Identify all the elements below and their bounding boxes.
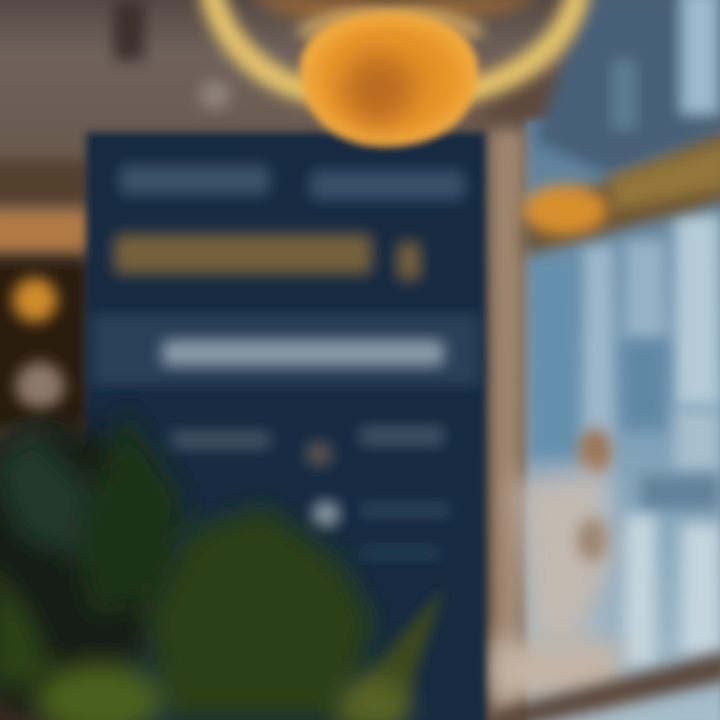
panel: wooden column [490, 130, 524, 720]
icon: figure in window [515, 428, 615, 650]
icon: orange wall lamp [523, 185, 607, 235]
panel: floor railing [490, 640, 720, 720]
panel: navy sign [86, 132, 486, 720]
panel: window facade [525, 0, 720, 720]
heading: blurred gold title [114, 234, 421, 280]
heading: blurred top labels [120, 165, 465, 200]
panel: left wall lights [0, 160, 90, 428]
panel: ceiling lamp [212, 0, 578, 146]
text block: lower details [170, 426, 450, 560]
text block: highlighted band [92, 314, 480, 386]
panel: ceiling details [114, 0, 580, 130]
icon: foreground plant [0, 410, 445, 720]
icon: gold diagonal sign [525, 130, 720, 255]
